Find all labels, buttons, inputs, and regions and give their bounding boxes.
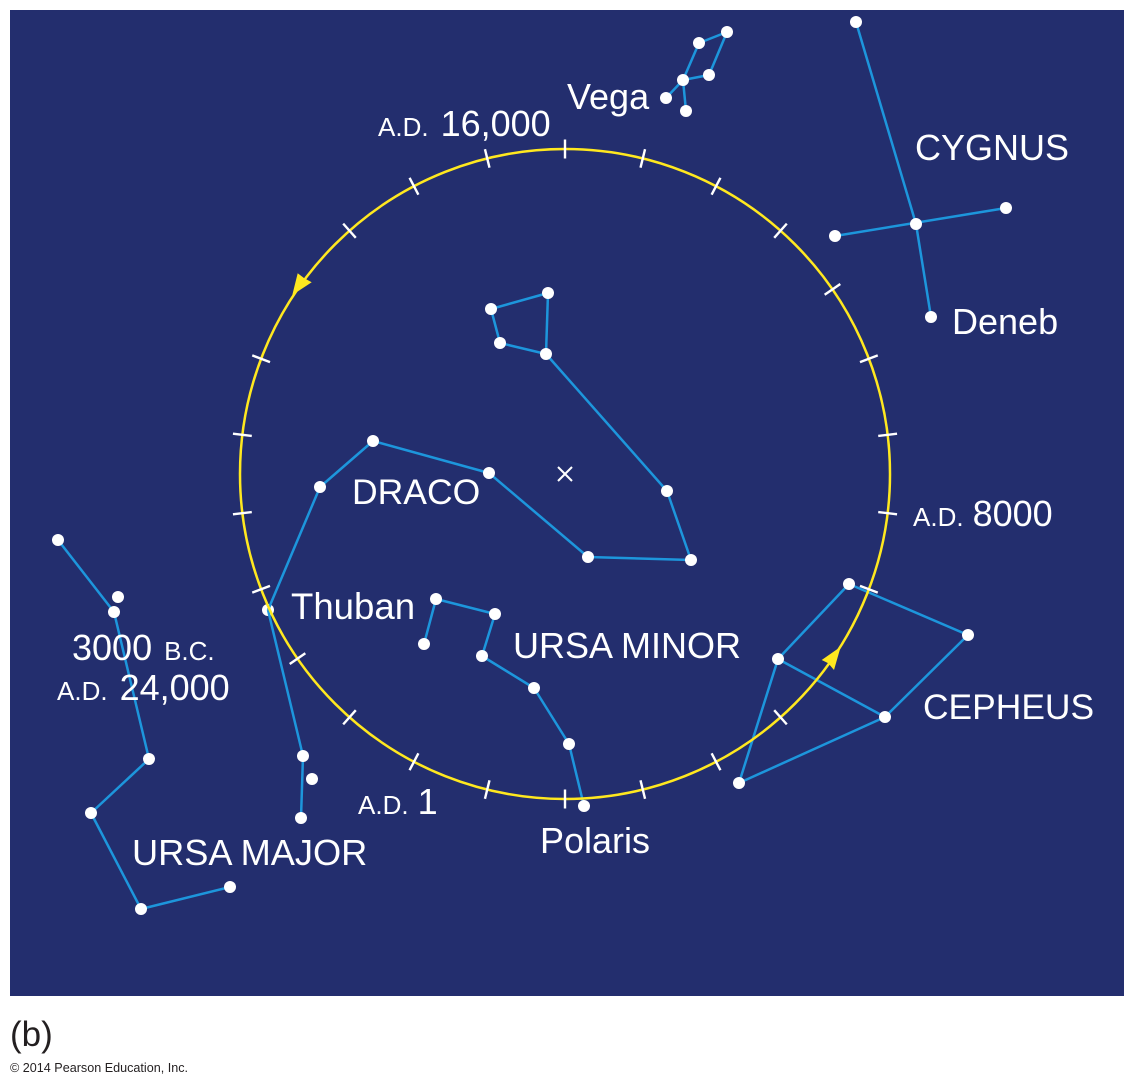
arrow: bottom right (822, 647, 841, 670)
star: Thuban (262, 604, 274, 616)
label: 3000 B.C.: 3000 B.C. (72, 627, 215, 668)
precession circle (240, 149, 890, 799)
stars (52, 16, 1012, 915)
center cross (558, 467, 572, 481)
tick marks (233, 140, 897, 808)
label: Draco: DRACO (352, 472, 480, 512)
label: A.D. 16,000: A.D. 16,000 (378, 103, 551, 144)
label: Cepheus: CEPHEUS (923, 687, 1094, 727)
label: Ursa Minor: URSA MINOR (513, 625, 741, 666)
label: A.D. 1: A.D.1 (358, 781, 438, 822)
label: Polaris: Polaris (540, 820, 650, 861)
label: Vega: Vega (567, 76, 650, 117)
label: Thuban: Thuban (291, 586, 415, 627)
label: Deneb: Deneb (952, 301, 1058, 342)
copyright: © 2014 Pearson Education, Inc. (10, 1061, 188, 1075)
panel letter: (b) (10, 1015, 53, 1054)
constellation lines (58, 22, 1006, 909)
label: Cygnus: CYGNUS (915, 127, 1069, 168)
label: Ursa Major: URSA MAJOR (132, 832, 367, 873)
label: A.D. 8000: A.D.8000 (913, 493, 1053, 534)
arrow: top left (292, 273, 312, 295)
label: A.D. 24,000: A.D. 24,000 (57, 667, 230, 708)
